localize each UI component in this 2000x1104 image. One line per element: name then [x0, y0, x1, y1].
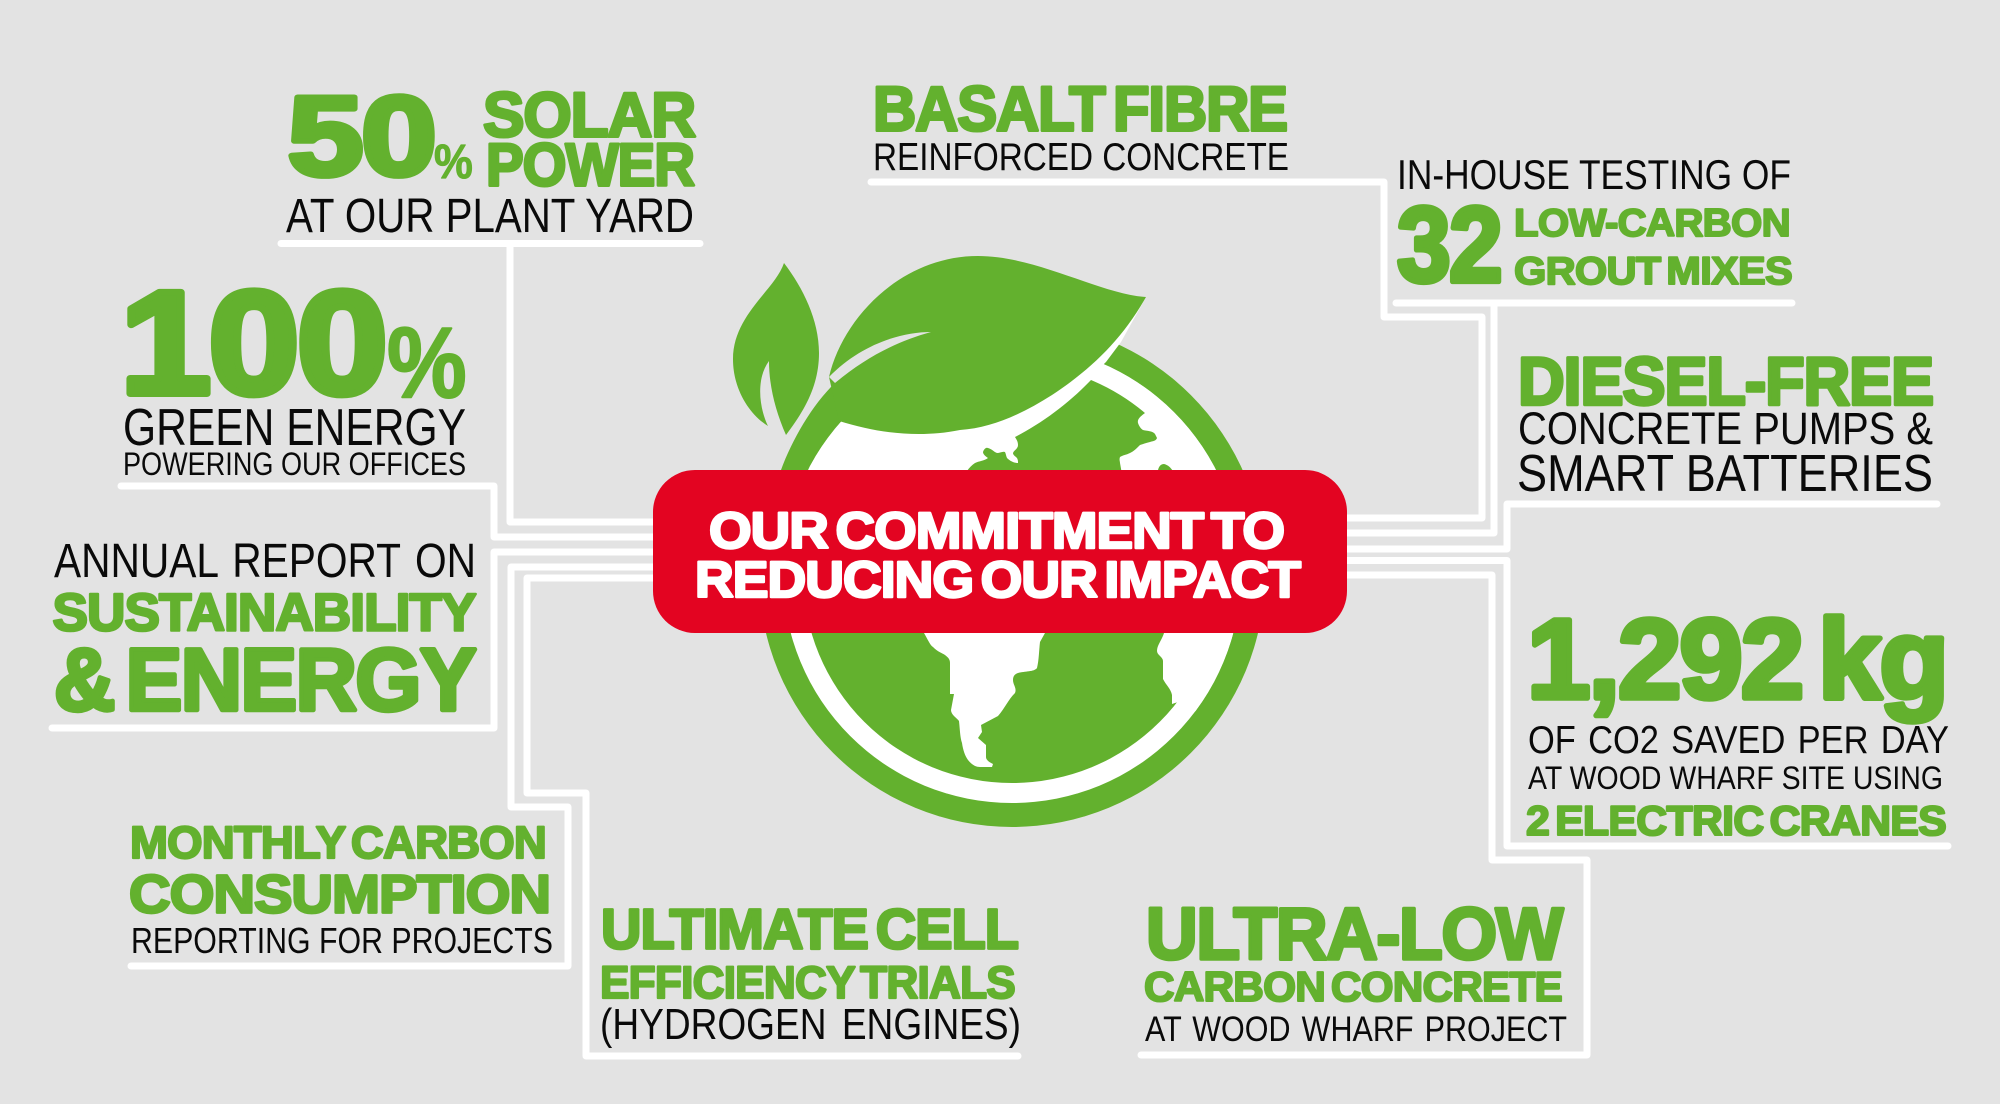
- globe disc: [766, 344, 1258, 827]
- text block: 1,292 kg of CO2 saved: OF CO2 SAVED PER DAY: [1528, 719, 1949, 762]
- icon: small leaf: [733, 263, 819, 435]
- text block: diesel-free: SMART BATTERIES: [1517, 445, 1933, 503]
- text block: 50% solar power: [286, 73, 696, 243]
- text block: annual report: & ENERGY: [54, 630, 476, 729]
- text block: basalt fibre: BASALT FIBRE: [873, 74, 1287, 144]
- text block: ultra-low carbon concrete: [1144, 894, 1567, 1049]
- text block: ultra-low carbon concrete: CARBON CONCRETE: [1144, 963, 1562, 1010]
- banner heading: REDUCING OUR IMPACT: [695, 551, 1301, 608]
- banner heading: OUR COMMITMENT TO: [709, 502, 1284, 559]
- text block: monthly carbon consumption: REPORTING FOR PROJECTS: [131, 920, 553, 961]
- text block: 50% solar power: 50: [288, 73, 434, 199]
- text block: basalt fibre: [873, 74, 1289, 179]
- text block: monthly carbon consumption: MONTHLY CARBON: [130, 817, 546, 868]
- text block: ultra-low carbon concrete: AT WOOD WHARF PROJECT: [1145, 1010, 1567, 1049]
- text block: diesel-free: DIESEL-FREE: [1518, 344, 1933, 420]
- text block: 50% solar power: AT OUR PLANT YARD: [286, 190, 694, 243]
- text block: 100% green energy: GREEN ENERGY: [123, 399, 466, 457]
- text block: diesel-free: [1517, 344, 1933, 503]
- red banner: [653, 470, 1347, 633]
- text block: ultimate cell efficiency: [600, 898, 1021, 1049]
- text block: 100% green energy: 100: [120, 262, 385, 426]
- text block: ultra-low carbon concrete: ULTRA-LOW: [1146, 894, 1563, 975]
- text block: 100% green energy: [120, 262, 466, 482]
- text block: 50% solar power: POWER: [486, 132, 695, 198]
- text block: ultimate cell efficiency: (HYDROGEN ENGINES): [600, 1000, 1021, 1049]
- leaf sliver: [829, 332, 931, 383]
- text block: diesel-free: CONCRETE PUMPS &: [1518, 403, 1933, 454]
- text block: 50% solar power: SOLAR: [483, 80, 696, 150]
- text block: 32 low-carbon grout mixes: LOW-CARBON: [1514, 202, 1790, 245]
- text block: annual report: [52, 535, 476, 729]
- icon: large leaf: [829, 256, 1146, 434]
- globe with leaves: [733, 256, 1300, 827]
- text block: 1,292 kg of CO2 saved: 1,292 kg: [1527, 596, 1947, 722]
- text block: 32 low-carbon grout mixes: 32: [1397, 184, 1501, 304]
- text block: 1,292 kg of CO2 saved: AT WOOD WHARF SITE USING: [1528, 760, 1943, 796]
- text block: ultimate cell efficiency: EFFICIENCY TRIALS: [600, 957, 1015, 1008]
- text block: 32 low-carbon grout mixes: [1397, 151, 1792, 304]
- text block: 32 low-carbon grout mixes: IN-HOUSE TESTING OF: [1397, 151, 1791, 198]
- text block: 100% green energy: %: [387, 307, 465, 419]
- text block: 100% green energy: POWERING OUR OFFICES: [123, 446, 466, 482]
- text block: 1,292 kg of CO2 saved: [1526, 596, 1949, 844]
- text block: 50% solar power: %: [434, 136, 472, 189]
- text block: 1,292 kg of CO2 saved: 2 ELECTRIC CRANES: [1526, 797, 1946, 844]
- white gap beside large leaf: [1050, 297, 1146, 392]
- text block: monthly carbon consumption: [129, 817, 553, 961]
- banner heading: [695, 502, 1301, 608]
- text block: annual report: ANNUAL REPORT ON: [54, 535, 476, 588]
- text block: basalt fibre: REINFORCED CONCRETE: [873, 136, 1289, 179]
- text block: annual report: SUSTAINABILITY: [52, 584, 476, 643]
- stem joining ring and leaf: [781, 332, 931, 470]
- text block: monthly carbon consumption: CONSUMPTION: [129, 865, 550, 925]
- text block: ultimate cell efficiency: ULTIMATE CELL: [601, 898, 1018, 962]
- text block: 32 low-carbon grout mixes: GROUT MIXES: [1514, 250, 1792, 293]
- connector lines: [52, 182, 1948, 1056]
